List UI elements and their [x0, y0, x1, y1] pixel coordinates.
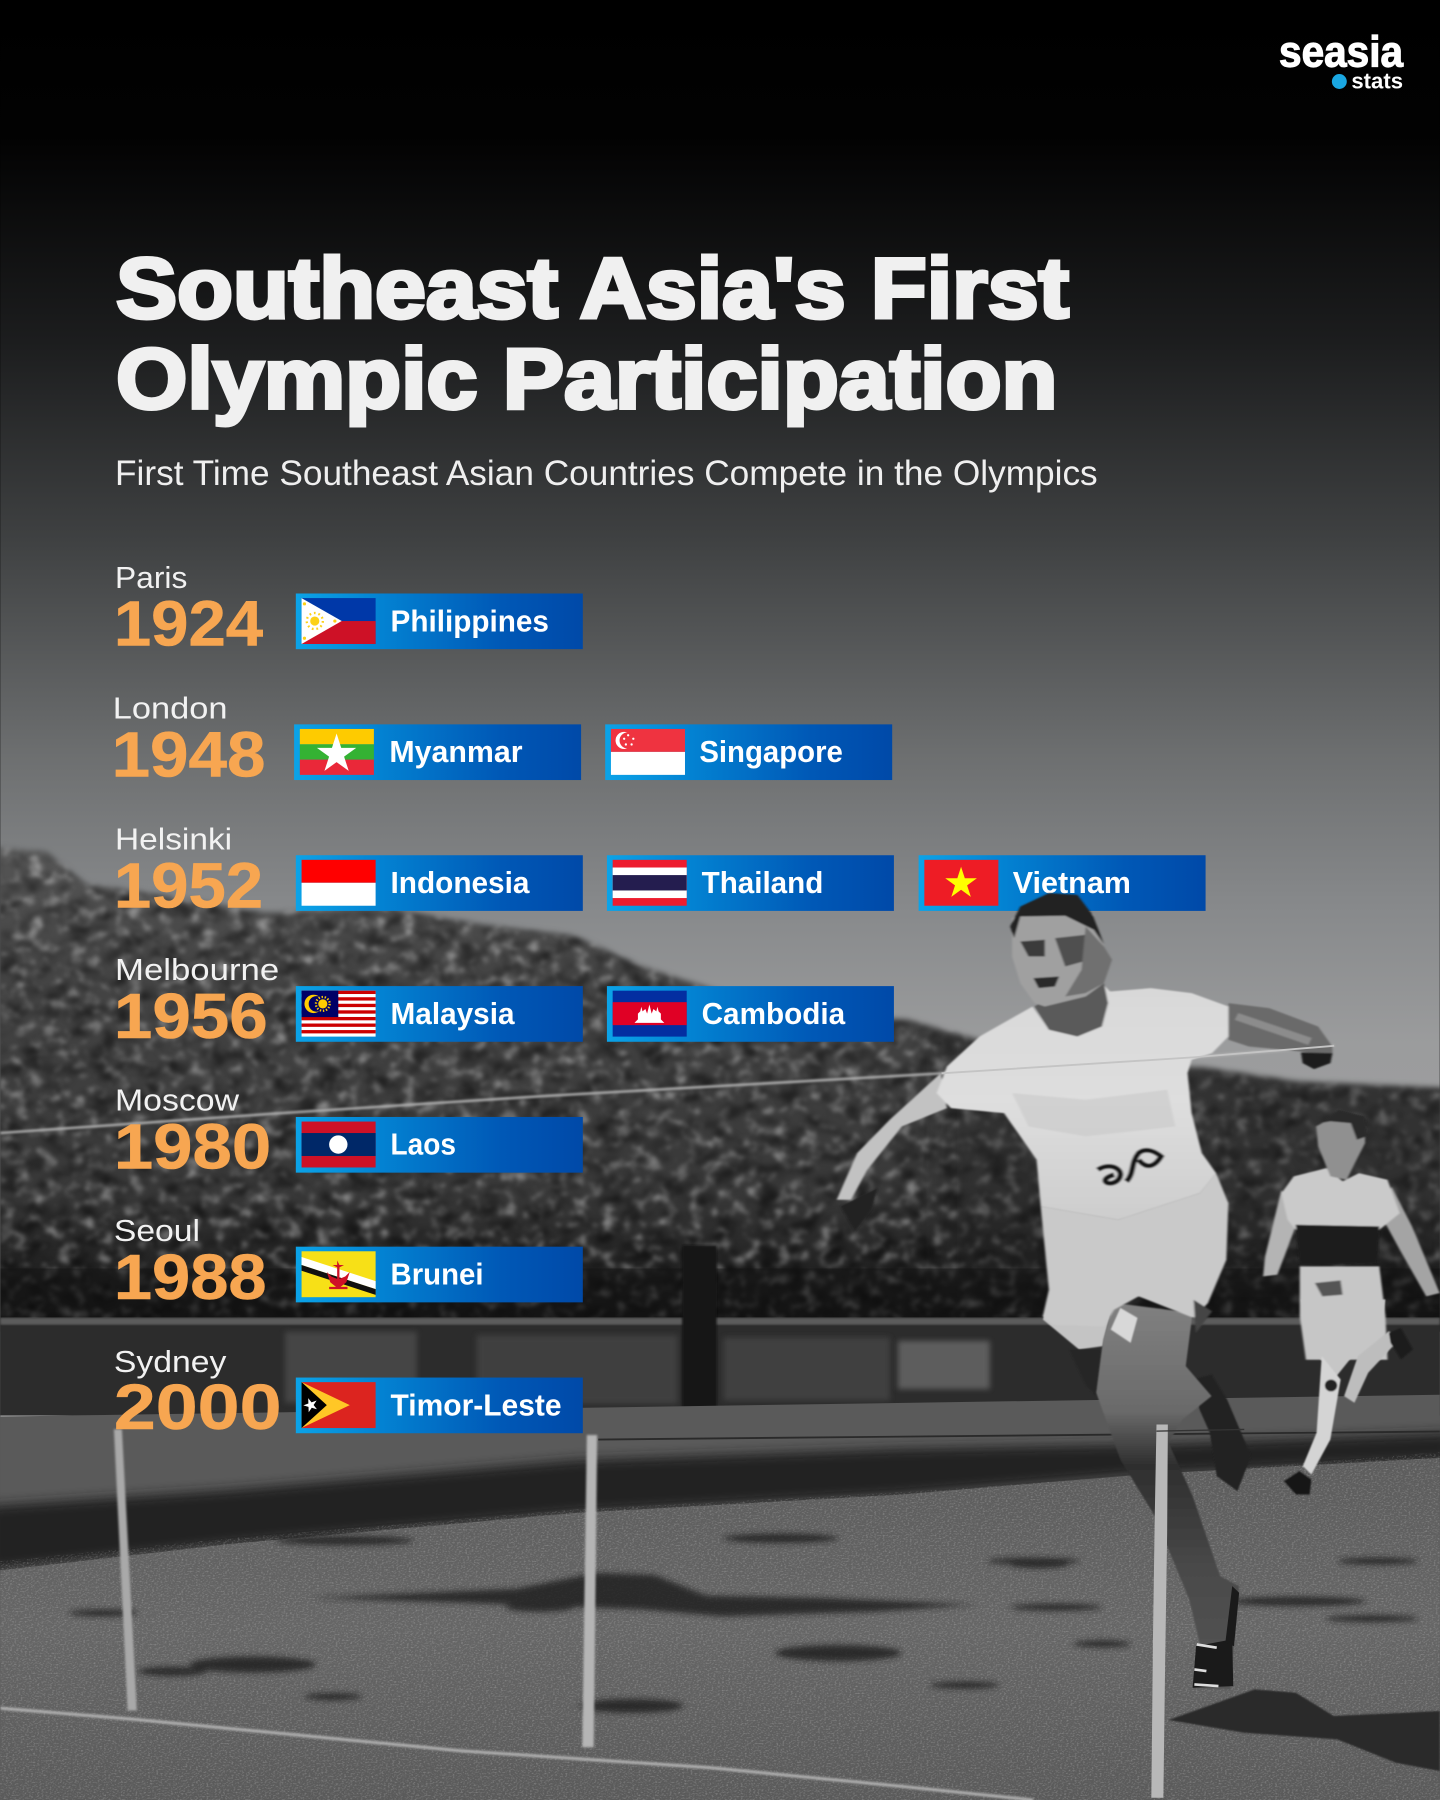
pill: Singapore: Singapore: [699, 734, 843, 769]
shirt: [937, 983, 1228, 1220]
row: Helsinki 1952: 1952: [114, 849, 263, 921]
race number: [1098, 1150, 1161, 1183]
row: Seoul 1988: 1988: [114, 1241, 267, 1313]
row: Moscow 1980: Moscow: [115, 1084, 240, 1118]
neck: [1035, 983, 1108, 1036]
row: Helsinki 1952: Helsinki: [115, 822, 232, 856]
second runner legs: [1284, 1299, 1413, 1494]
title: Southeast Asia's First: [116, 240, 1069, 335]
pill: Laos: Laos: [391, 1126, 456, 1161]
title: [116, 240, 1069, 426]
pill: Vietnam: Vietnam: [1013, 865, 1131, 900]
row: Sydney 2000: Sydney: [114, 1345, 227, 1379]
row: Sydney 2000: [114, 1345, 583, 1443]
pill: Singapore: [605, 724, 892, 780]
row: Seoul 1988: [114, 1214, 583, 1313]
pill: Indonesia: [296, 855, 583, 911]
pill: Philippines: Philippines: [391, 603, 549, 638]
row: London 1948: [112, 692, 892, 791]
pill: Thailand: Thailand: [702, 865, 823, 900]
right arm: [1228, 1003, 1332, 1069]
pill: Cambodia: Cambodia: [702, 996, 846, 1031]
row: Moscow 1980: [114, 1084, 583, 1183]
subtitle: First Time Southeast Asian Countries Compete in the Olympics: [115, 454, 1098, 493]
logo: seasia stats: seasia: [1279, 29, 1404, 77]
face: [1012, 901, 1112, 1006]
pill: Cambodia: [607, 986, 894, 1042]
pill: Malaysia: [296, 986, 583, 1042]
logo: seasia stats: stats: [1351, 68, 1403, 93]
pill: Indonesia: Indonesia: [391, 865, 530, 900]
row: Paris 1924: [114, 561, 583, 660]
row: London 1948: London: [113, 692, 228, 726]
row: Seoul 1988: Seoul: [114, 1214, 200, 1248]
row: London 1948: 1948: [112, 719, 265, 791]
pill: Myanmar: Myanmar: [389, 734, 523, 769]
row: Sydney 2000: 2000: [114, 1371, 281, 1443]
pill: Brunei: [296, 1247, 583, 1302]
row: Melbourne 1956: Melbourne: [115, 953, 279, 987]
pill: Philippines: [296, 593, 583, 649]
row: Paris 1924: 1924: [114, 588, 263, 660]
row: Melbourne 1956: 1956: [114, 980, 268, 1052]
pill: Malaysia: Malaysia: [391, 996, 515, 1031]
main runner legs and shadow: [1043, 1299, 1440, 1798]
hair: [1010, 893, 1104, 945]
pill: Myanmar: [294, 724, 581, 780]
row: Moscow 1980: 1980: [114, 1111, 271, 1183]
pill: Laos: [296, 1117, 583, 1173]
second runner: [1263, 1110, 1440, 1360]
main runner torso, arms and head: [837, 893, 1332, 1333]
row: Helsinki 1952: [114, 822, 1206, 921]
title: Olympic Participation: [116, 331, 1058, 426]
pill: Brunei: Brunei: [391, 1257, 484, 1292]
pill: Timor-Leste: Timor-Leste: [391, 1387, 562, 1422]
row: Melbourne 1956: [114, 953, 894, 1052]
pill: Timor-Leste: [296, 1378, 583, 1433]
left arm: [837, 1073, 947, 1231]
pill: Vietnam: [919, 855, 1206, 911]
pill: Thailand: [607, 855, 894, 911]
shorts: [1041, 1173, 1228, 1326]
finish tape across runner: [942, 1046, 1334, 1073]
shirt fold: [1012, 1090, 1175, 1136]
row: Paris 1924: Paris: [115, 561, 187, 595]
shorts seam: [1194, 1300, 1212, 1333]
